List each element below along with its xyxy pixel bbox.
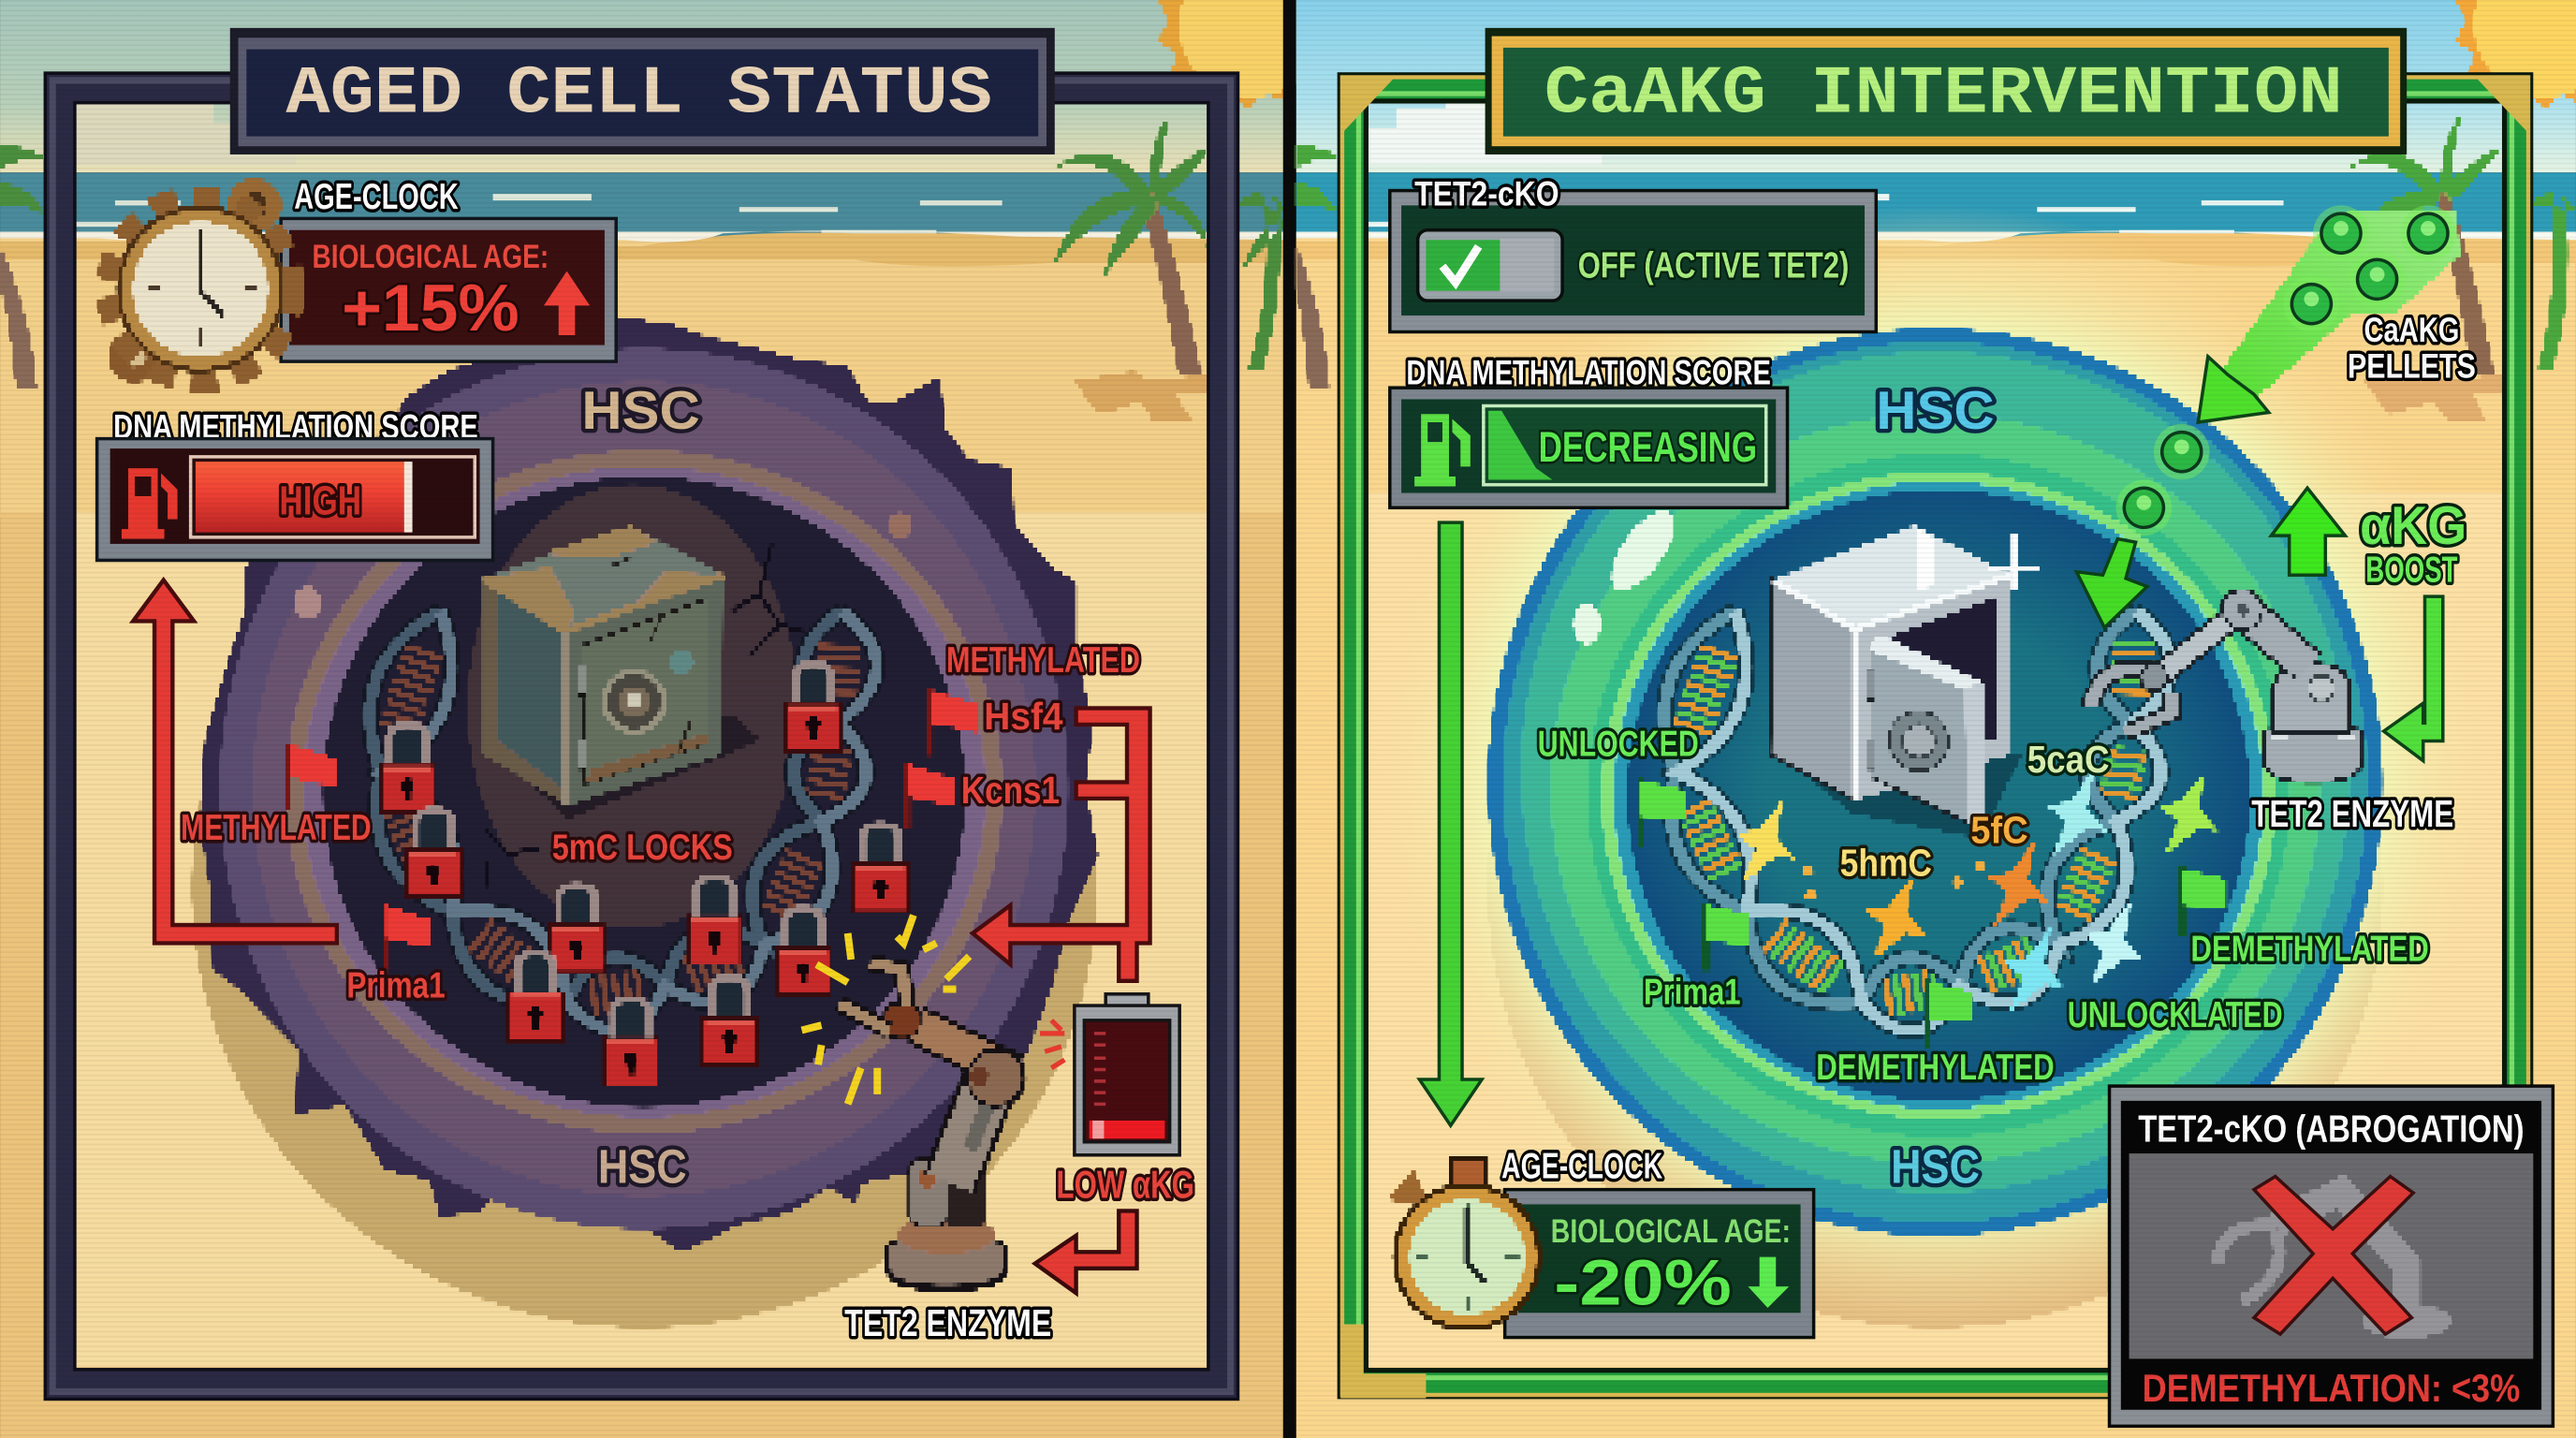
value: plus 15 percent: +15% [342, 271, 520, 345]
label: TET2-cKO: TET2-cKO [1414, 174, 1559, 213]
label: Prima1 intervention: Prima1 [1644, 972, 1741, 1012]
panel: intervention methylation gauge [1390, 388, 1788, 507]
arrow: aKG boost up [2271, 488, 2345, 575]
label: Prima1 aged: Prima1 [346, 965, 446, 1005]
label: age clock intervention: AGE-CLOCK [1501, 1146, 1662, 1186]
panel: intervention age readout [1505, 1190, 1814, 1338]
icon: gold frame corners [1340, 76, 2530, 1399]
arrow: gene bracket to locks [973, 708, 1150, 981]
panel: intervention title banner [1486, 28, 2407, 154]
arrow: pellet entry [2076, 539, 2147, 627]
panel: aged background scene [0, 0, 1288, 1438]
cell glow [1368, 205, 2502, 1339]
label: 5fC: 5fC [1970, 808, 2028, 851]
icon: sun intervention [2456, 0, 2576, 109]
cell shadow intervention [1488, 447, 2382, 1328]
label: CaAKG pellets: CaAKG [2364, 311, 2459, 349]
icon: palm trees aged [0, 115, 1288, 420]
label: CaAKG pellets [2348, 311, 2476, 386]
value: minus 20 percent: -20% [1554, 1246, 1732, 1318]
label: biological age intervention: BIOLOGICAL AGE: [1551, 1213, 1791, 1250]
panel: TET2-cKO abrogation inset [2110, 1086, 2553, 1426]
panel: aged age clock readout [279, 217, 618, 363]
label: high: HIGH [279, 477, 361, 523]
label: TET2 enzyme aged: TET2 ENZYME [844, 1301, 1051, 1344]
illustration: rusty safe [483, 526, 759, 818]
label: aKG: αKG [2360, 496, 2466, 556]
arrow: feedback to methylation score [133, 580, 337, 943]
cell shadow aged [192, 447, 1096, 1328]
label: demethylated bottom: DEMETHYLATED [1816, 1048, 2055, 1088]
icons: demethylated flags [1638, 777, 2226, 1049]
icon: sparks aged [802, 916, 970, 1104]
icon: gear clock [109, 185, 292, 381]
title: CaAKG intervention: CaAKG INTERVENTION [1544, 55, 2343, 132]
panel: intervention frame [1342, 77, 2528, 1395]
illustration: active TET2 arm [2089, 590, 2363, 782]
icon: fuel pump green [1414, 414, 1471, 486]
heading: HSC top intervention: HSC [1876, 381, 1995, 441]
label: boost: BOOST [2365, 550, 2458, 590]
illustration: repaired DNA helix [1664, 611, 2171, 1031]
label: dna methylation score intervention: DNA METHYLATION SCORE [1406, 354, 1771, 392]
arrow: boost to enzyme [2384, 596, 2443, 761]
label: Hsf4: Hsf4 [984, 695, 1063, 738]
icon: stopwatch [1388, 1158, 1541, 1331]
panel: TET2-cKO toggle [1390, 174, 1876, 332]
panel: aged title banner [230, 28, 1055, 154]
icon: fuel pump red [122, 468, 178, 539]
panel: aged HSC cell [200, 317, 1097, 1252]
panel: aged frame [52, 81, 1231, 1392]
label: CaAKG pellets: PELLETS [2348, 347, 2476, 386]
arrow: pellet stream [2198, 211, 2459, 422]
heading: HSC bottom intervention: HSC [1891, 1140, 1980, 1194]
label: 5mC locks: 5mC LOCKS [552, 828, 733, 868]
panel: aged methylation gauge [97, 439, 493, 560]
heading: HSC top aged: HSC [581, 381, 700, 441]
icon: sun aged [1158, 0, 1325, 109]
label: dna methylation score aged: DNA METHYLATION SCORE [113, 408, 478, 447]
panel: intervention HSC cell [1488, 329, 2382, 1236]
icons: oxidation sparks [1736, 772, 2217, 1010]
icons: CaAKG pellets [2116, 205, 2456, 536]
label: 5caC: 5caC [2027, 738, 2110, 781]
heading: HSC bottom aged: HSC [598, 1140, 687, 1194]
arrow: low aKG to enzyme [1035, 1211, 1137, 1293]
illustration: open safe [1771, 526, 2041, 838]
icon: toggle switch [1418, 230, 1562, 301]
label: methylated right: METHYLATED [946, 640, 1140, 681]
icon: red X [2254, 1177, 2413, 1334]
label: 5hmC: 5hmC [1840, 841, 1932, 884]
icon: low battery [1040, 994, 1179, 1155]
icon: down arrow [1748, 1257, 1789, 1308]
illustration: disabled arm [2217, 1191, 2450, 1338]
label: toggle status: OFF (ACTIVE TET2) [1578, 246, 1849, 286]
label: methylated left: METHYLATED [181, 808, 372, 848]
label: demethylated right: DEMETHYLATED [2190, 930, 2429, 970]
label: decreasing: DECREASING [1539, 423, 1757, 471]
label: unlocklated: UNLOCKLATED [2068, 995, 2283, 1035]
label: biological age aged: BIOLOGICAL AGE: [313, 239, 549, 275]
icons: methylated flags [285, 690, 977, 971]
label: TET2 enzyme intervention: TET2 ENZYME [2251, 792, 2453, 835]
panel: intervention background scene [1296, 0, 2576, 1438]
icon: palm trees intervention [1296, 115, 2576, 420]
icons: 5mC padlocks [381, 664, 907, 1086]
arrow: methylation to age [1419, 522, 1482, 1125]
title: aged cell status: AGED CELL STATUS [285, 55, 992, 132]
illustration: aged DNA helix [370, 611, 876, 1031]
label: demethylation under 3 percent: DEMETHYLATION: <3% [2143, 1366, 2520, 1410]
label: age clock aged: AGE-CLOCK [294, 177, 459, 217]
illustration: rusty TET2 arm [840, 962, 1023, 1291]
divider [1283, 0, 1296, 1438]
panel: aged frame interior [74, 513, 1211, 1367]
label: unlocked: UNLOCKED [1538, 724, 1699, 764]
icon: up arrow [544, 271, 590, 335]
label: Kcns1: Kcns1 [961, 769, 1060, 812]
label: low aKG: LOW αKG [1057, 1162, 1194, 1206]
